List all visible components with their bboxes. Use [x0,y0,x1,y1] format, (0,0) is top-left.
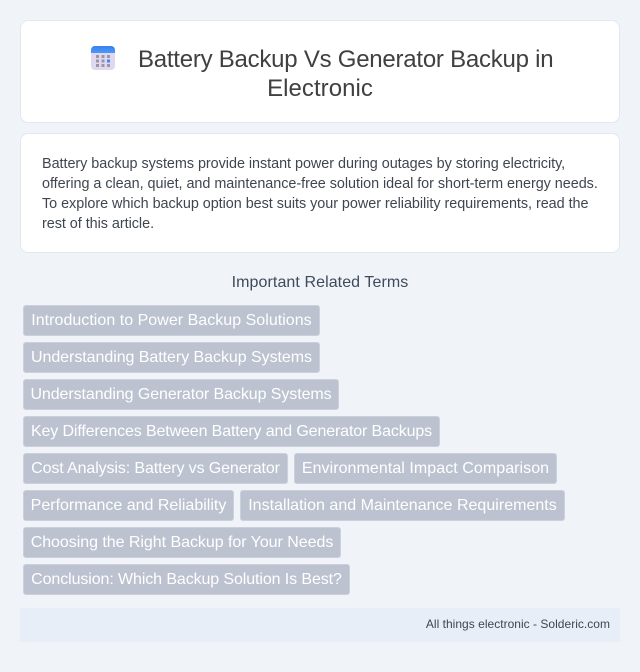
description text: Battery backup systems provide instant power during outages by storing electricity, [42,156,565,172]
description text [42,156,598,232]
tag: Key Differences Between Battery and Generator Backups [31,423,432,440]
tag [23,342,320,373]
tag: Performance and Reliability [31,497,226,514]
tag: Understanding Battery Backup Systems [31,349,312,366]
tag [23,379,339,410]
tag [23,305,320,336]
tag [23,490,234,521]
tag: Conclusion: Which Backup Solution Is Best? [31,571,342,588]
tag [23,453,288,484]
tag [240,490,565,521]
footer bar [20,608,620,642]
tag: Choosing the Right Backup for Your Needs [31,534,333,551]
title: Battery Backup Vs Generator Backup in [138,46,553,73]
heading: related terms: Important Related Terms [232,274,408,291]
footer text: All things electronic - Solderic.com [426,617,610,631]
tag: Installation and Maintenance Requirements [248,497,557,514]
title: Electronic [267,75,373,102]
description card [20,133,620,253]
tag: Introduction to Power Backup Solutions [31,312,312,329]
description text: To explore which backup option best suits your power reliability requirements, read the [42,196,588,212]
tag [23,527,341,558]
tag: Environmental Impact Comparison [302,460,549,477]
tag list [23,305,565,595]
icon: calendar [91,46,115,70]
tag: Understanding Generator Backup Systems [30,386,332,403]
description text: offering a clean, quiet, and maintenance-free solution ideal for short-term energy needs. [42,176,598,192]
tag: Cost Analysis: Battery vs Generator [31,460,280,477]
header card [20,20,620,123]
tag [23,416,440,447]
description text: rest of this article. [42,216,154,232]
tag [23,564,350,595]
tag [294,453,557,484]
title [138,46,553,102]
